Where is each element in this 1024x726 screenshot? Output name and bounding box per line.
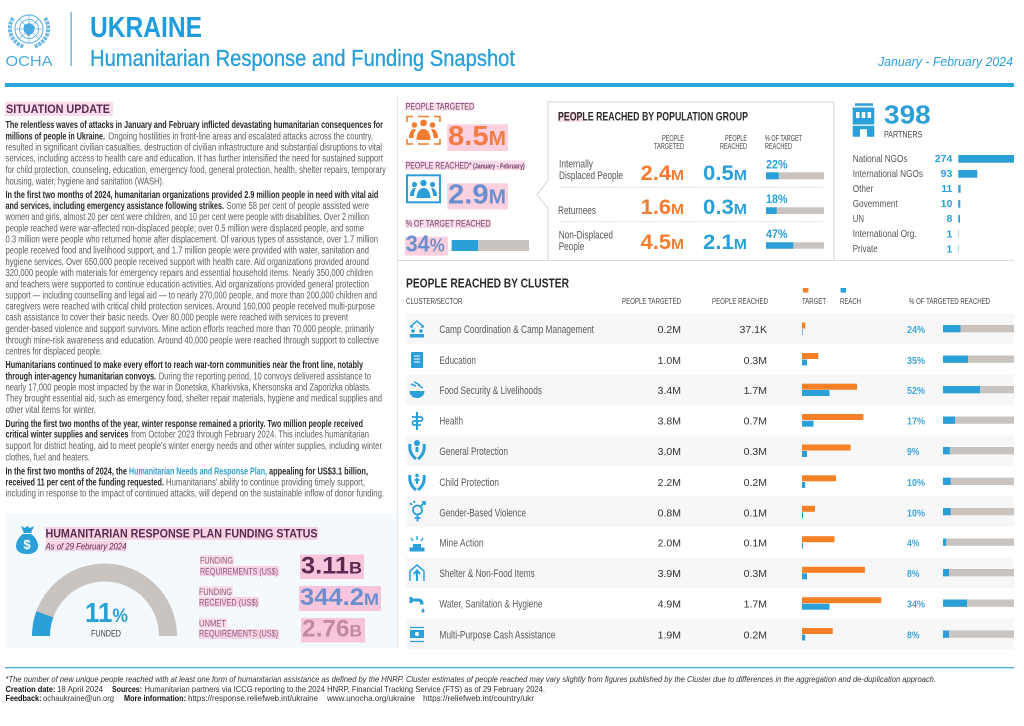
text block: situation narrative: women and girls, almost 20 per cent were children, and 10 per cent were people with disabilities. Over 2 million [5,212,369,223]
row: mine action: 2.0M [658,538,681,550]
footer: Sources: [112,684,142,694]
icon: protective hands [410,440,424,459]
column headers: PEOPLE [725,134,747,143]
row: child protection: 10% [907,477,926,489]
stat: partner count: PARTNERS [884,130,922,140]
text block: situation narrative: for child protection, counseling, education, emergency food, general protection, health, shelter repairs, temporary [6,165,386,176]
row: gender-based violence [406,496,1014,527]
text block: situation narrative: through inter-agency humanitarian convoys. [6,371,156,382]
table header: REACH [840,297,861,306]
row: food security [406,374,1014,405]
text block: situation narrative [5,120,386,499]
row: water, sanitation and hygiene: 34% [907,598,926,610]
column headers [654,134,802,151]
text block: situation narrative: received 11 per cent of the funding requested. [6,477,164,488]
text block: situation narrative: Some 58 per cent of people assisted were [226,201,369,212]
footer: *The number of new unique people reached with at least one form of humanitarian assistance as defined by the HNRP. Cluster estimates of people reached may vary slightly from figures published by the Cluster due to differences in the aggregation and de-duplication approach. [6,674,936,684]
row: internally displaced people: Displaced People [559,170,623,182]
icon: book [411,352,423,368]
row: health: 0.7M [744,416,767,428]
text block: situation narrative: support — including counselling and legal aid — to nearly 270,000 people, and more than 200,000 children and [6,291,377,302]
chart: partner types: 1 [946,243,952,255]
text block: situation narrative: gender-based violence and support survivors. Mine action efforts reached more than 70,000 people, primarily [6,324,374,335]
text block: situation narrative: critical winter supplies and services [6,430,128,441]
footer: www.unocha.org/ukraine [326,693,415,703]
row: education: 0.3M [744,355,767,367]
icon: money bag [16,526,38,554]
row: mine action: 0.1M [744,538,767,550]
table header: TARGET [802,297,826,306]
chart: partner types: Private [853,243,878,255]
footer: Humanitarian partners via ICCG reporting to the 2024 HNRP, Financial Tracking Service (FTS) as of 29 February 2024. [144,684,545,694]
chart: funding gauge: 11% [85,597,128,628]
column headers: PEOPLE [662,134,684,143]
row: multi-purpose cash assistance: 8% [907,630,920,642]
chart: partner types: Government [853,198,898,210]
icon: food bowl [410,382,424,398]
icon: people target frame [407,116,440,144]
stat: unmet requirements: REQUIREMENTS (US$) [199,628,278,640]
icon: camp house [410,321,424,338]
text block: situation narrative: They brought essential aid, such as emergency food, shelter repair materials, hygiene and medical supplies and [6,394,382,405]
row: food security: 1.7M [744,385,767,397]
stat: percent of target reached [405,219,529,257]
text block: situation narrative: In the first two months of 2024, the [6,466,127,477]
text block: situation narrative: hygiene services. Over 650,000 people received support with health care. Aid organizations provided around [6,257,369,268]
row: shelter and non-food items: 0.3M [744,568,767,580]
row: non-displaced people: 4.5M [641,231,684,254]
chart: partner types: 274 [935,153,952,165]
footer: Creation date: [6,684,56,694]
text block: situation narrative: millions of people in Ukraine. [6,131,105,142]
column headers: % OF TARGET [765,134,802,143]
row: internally displaced people: 22% [766,158,788,172]
row: child protection: 0.2M [744,477,767,489]
row: gender-based violence: Gender-Based Violence [439,508,526,520]
chart: partner types: International NGOs [853,168,923,180]
table header: % OF TARGETED REACHED [909,297,990,306]
text block: situation narrative: Humanitarian Needs and Response Plan, [129,466,267,477]
row: education: 35% [907,355,926,367]
icon: OCHA UN emblem logo [6,15,52,70]
row: non-displaced people: Non-Displaced [559,230,613,242]
stat: funding received [199,584,381,611]
stat: unmet requirements: 2.76B [302,616,362,642]
row: health [412,412,1014,430]
date range: January - February 2024 [877,54,1013,69]
row: internally displaced people: Internally [559,159,593,171]
chart: funding gauge: FUNDED [91,628,121,640]
icon: OCHA UN emblem logo: OCHA [6,53,52,70]
panel: key figures [405,101,529,257]
row: multi-purpose cash assistance [406,618,1014,649]
chart: partner types: 10 [941,198,952,210]
panel: people reached by cluster [406,276,1014,649]
row: health: Health [439,416,463,428]
text block: situation narrative: people received food and livelihood support, and 1.7 million people were provided with water, sanitation and [6,246,369,257]
stat: percent of target reached: % OF TARGET REACHED [406,219,491,229]
table header: PEOPLE REACHED [712,297,768,306]
row: education [411,352,1014,368]
row: returnees: Returnees [558,205,596,217]
text block: situation narrative: Humanitarians’ ability to continue providing timely support, [166,477,365,488]
footer: 18 April 2024 [57,684,103,694]
text block: situation narrative: resulted in significant civilian casualties, destruction of civilian infrastructure and substantial disruptions to vital [6,143,382,154]
header [5,12,1014,87]
icon: water tap [410,597,424,612]
stat: people targeted: 8.5M [448,120,506,151]
row: food security: 52% [907,385,926,397]
heading: cluster: PEOPLE REACHED BY CLUSTER [406,276,569,290]
text block: situation narrative: nearly 17,000 people most impacted by the war in Donetska, Kharkivska, Khersonska and Zaporizka oblasts. [6,383,371,394]
stat: unmet requirements: UNMET [199,618,226,630]
stat: people reached: PEOPLE REACHED* [406,160,472,170]
row: mine action [410,536,1014,552]
text block: situation narrative: services, including access to health care and education. It has further intensified the need for sustained support [6,154,383,165]
text block: situation narrative: During the first two months of the year, winter response remained a priority. Two million people received [6,419,363,430]
stat: funding received: RECEIVED (US$) [199,598,258,608]
row: education: Education [439,355,476,367]
row: gender-based violence: 0.1M [744,508,767,520]
row: child protection: Child Protection [439,477,499,489]
stat: partner count: 398 [884,101,931,129]
icon: people group box [407,175,440,202]
heading: population group: PEOPLE REACHED BY POPULATION GROUP [558,111,748,123]
text block: situation narrative: and services, including emergency assistance following strikes. [6,201,224,212]
footer: https://reliefweb.int/country/ukr [423,693,534,703]
text block: situation narrative: The relentless waves of attacks in January and February inflicted devastating humanitarian consequences for [6,120,383,131]
icon: cash [410,628,424,642]
row: water, sanitation and hygiene: Water, Sanitation & Hygiene [439,598,543,610]
text block: situation narrative: In the first two months of 2024, humanitarian organizations provided 2.9 million people in need with vital aid [6,190,378,201]
row: non-displaced people [559,227,824,254]
icon: mine [410,536,424,552]
row: multi-purpose cash assistance: 1.9M [658,630,681,642]
row: multi-purpose cash assistance: Multi-Purpose Cash Assistance [439,630,555,642]
row: water, sanitation and hygiene [410,597,1014,612]
stat: people targeted [405,101,508,151]
stat: funding requirements: REQUIREMENTS (US$) [200,566,278,578]
column headers: REACHED [720,142,747,151]
row: health: 3.8M [658,416,681,428]
text block: situation narrative: clothes, fuel and heaters. [6,452,90,463]
text block: situation narrative: including in response to the impact of continued attacks, will depend on the sustainable inflow of donor funding. [6,488,384,499]
table header [406,288,990,306]
row: non-displaced people: People [559,241,584,253]
stat: funding requirements: 3.11B [301,552,362,580]
text block: situation narrative: from October 2023 through February 2024. This includes humanitarian [131,430,369,441]
row: shelter and non-food items: Shelter & Non-Food Items [439,568,535,580]
row: health: 17% [907,416,926,428]
stat: people reached: 2.9M [448,178,506,210]
footer: Feedback: [6,693,42,703]
row: internally displaced people: 2.4M [641,162,684,185]
text block: situation narrative: people reached were war-affected non-displaced people; over 0.5 million were displaced people, and some [6,223,364,234]
footer: More information: [124,693,186,703]
stat: people targeted: PEOPLE TARGETED [406,101,475,111]
chart: funding gauge [32,564,177,640]
row: general protection [406,436,1014,466]
chart: partner types: 93 [941,168,952,180]
row: returnees: 18% [766,192,788,206]
table header: CLUSTER/SECTOR [406,297,463,306]
row: shelter and non-food items: 8% [907,568,920,580]
text block: situation narrative: 320,000 people with materials for emergency repairs and essential household items. Nearly 350,000 children [6,268,373,279]
text block: situation narrative: During the reporting period, 10 convoys delivered assistance to [159,371,371,382]
stat: unmet requirements [199,616,365,642]
chart: partner types: International Org. [853,228,917,240]
row: camp coordination: 0.2M [658,324,681,336]
text block: situation narrative: appealing for US$3.1 billion, [269,466,368,477]
row: camp coordination: 37.1K [740,324,767,336]
footer: ochaukraine@un.org [43,693,114,703]
text block: situation narrative: support for district heating, aid to meet people’s winter energy needs and other winter supplies, including winter [6,441,383,452]
stat: people reached [405,160,525,210]
row: general protection: 3.0M [658,446,681,458]
row: multi-purpose cash assistance: 0.2M [744,630,767,642]
stat: people reached: (January - February) [473,161,525,170]
row: general protection: 9% [907,446,920,458]
text block: situation narrative: centres for displaced people. [6,346,102,357]
footer [5,667,1014,703]
text block: situation narrative: 0.3 million were people who returned home after displacement. Of various types of assistance, over 1.7 million [6,234,378,245]
chart: partner types: 8 [946,213,952,225]
row: internally displaced people: 0.5M [703,162,747,185]
column headers: TARGETED [654,142,684,151]
text block: situation narrative: Ongoing hostilities in front-line areas and escalated attacks across the country, [108,131,373,142]
text block: situation narrative: and teachers were supported to continue education activities. Aid organizations provided general protection [6,279,369,290]
heading: funding status: HUMANITARIAN RESPONSE PLAN FUNDING STATUS [46,526,318,540]
row: non-displaced people: 47% [766,227,788,241]
icon: gender symbol [410,501,425,522]
chart: partner types: National NGOs [853,153,907,165]
chart: partner types: UN [853,213,864,225]
icon: shelter [410,565,424,581]
icon: health staff [412,412,422,430]
row: education: 1.0M [658,355,681,367]
stat: funding requirements [200,552,364,580]
date note: As of 29 February 2024 [45,542,126,552]
stat: funding received: 344.2M [300,584,379,611]
row: internally displaced people [559,158,824,185]
icon: child in hands [410,474,424,490]
row: general protection: General Protection [439,446,508,458]
panel: people reached by population group [537,102,834,260]
stat: percent of target reached: 34% [406,231,445,257]
title: UKRAINE [90,12,202,44]
row: shelter and non-food items: 3.9M [658,568,681,580]
row: gender-based violence: 0.8M [658,508,681,520]
row: mine action: 4% [907,538,920,550]
chart: partner types [853,153,1014,255]
text block: situation narrative: caregivers were reached with critical child protection services. Around 160,000 people received multi-purpose [6,302,375,313]
footer: https://response.reliefweb.int/ukraine [188,693,318,703]
row: general protection: 0.3M [744,446,767,458]
stat: funding received: FUNDING [199,587,232,598]
icon: partners building [853,103,874,137]
chart: partner types: 1 [946,228,952,240]
text block: situation narrative: Humanitarians continued to make every effort to reach war-torn communities near the front line, notably [6,360,363,371]
row: gender-based violence: 10% [907,508,926,520]
chart: partner types: Other [853,183,874,195]
table header: PEOPLE TARGETED [622,297,681,306]
stat: funding requirements: FUNDING [200,556,233,566]
panel: partners [853,101,1014,255]
row: camp coordination: 24% [907,324,926,336]
text block: situation narrative: other vital items for winter. [6,405,96,416]
row: returnees [558,192,824,219]
row: camp coordination [406,314,1014,344]
panel: situation update [5,102,386,499]
row: water, sanitation and hygiene: 4.9M [658,598,681,610]
row: water, sanitation and hygiene: 1.7M [744,598,767,610]
row: child protection: 2.2M [658,477,681,489]
row: returnees: 1.6M [641,196,684,219]
row: returnees: 0.3M [703,196,747,219]
panel: funding status [6,513,397,648]
row: food security: Food Security & Livelihoods [439,385,542,397]
column headers: REACHED [765,142,792,151]
row: non-displaced people: 2.1M [703,231,747,254]
row: camp coordination: Camp Coordination & Camp Management [439,324,594,336]
row: shelter and non-food items [406,558,1014,588]
stat: partner count [884,101,931,140]
text block: situation narrative: cash assistance to cover their basic needs. Over 80,000 people were reached with services to prevent [6,313,348,324]
row: child protection [410,474,1014,490]
subtitle: Humanitarian Response and Funding Snapshot [90,45,516,71]
heading: situation update: SITUATION UPDATE [6,102,110,116]
text block: situation narrative: through mine-risk awareness and education. Around 40,000 people were reached through support to collective [6,335,379,346]
chart: partner types: 11 [941,183,952,195]
icon: money bag: $ [23,537,31,552]
row: mine action: Mine Action [439,538,484,550]
row: food security: 3.4M [658,385,681,397]
text block: situation narrative: housing, water, hygiene and sanitation (WASH). [6,176,164,187]
